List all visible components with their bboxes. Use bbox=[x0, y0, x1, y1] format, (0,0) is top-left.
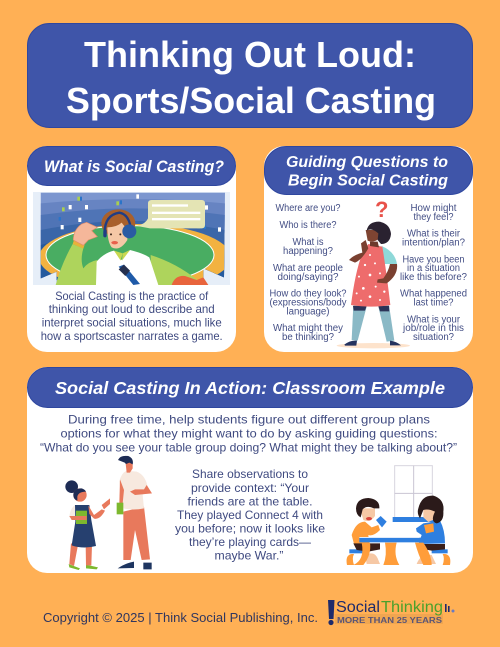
description text: interpret social situations, much like bbox=[42, 316, 222, 330]
title: Sports/Social Casting bbox=[66, 80, 436, 121]
questions: right column: job/role in this bbox=[402, 323, 464, 334]
logo: Social Thinking: Thinking bbox=[381, 599, 443, 616]
questions: left column bbox=[270, 203, 347, 343]
illustration: thinking woman: ? bbox=[375, 197, 388, 222]
title: Thinking Out Loud: bbox=[84, 34, 416, 75]
questions: left column: be thinking? bbox=[282, 332, 334, 343]
intro text bbox=[40, 414, 457, 454]
questions: left column: happening? bbox=[283, 246, 333, 257]
description text: how a sportscaster narrates a game. bbox=[41, 330, 223, 343]
questions: right column: What happened bbox=[400, 288, 467, 300]
example text: maybe War.” bbox=[214, 550, 284, 562]
questions: left column: What are people bbox=[273, 263, 343, 274]
example text: They played Connect 4 with bbox=[177, 509, 323, 522]
example text bbox=[175, 468, 325, 562]
heading: what is social casting bbox=[28, 146, 236, 186]
heading: guiding questions bbox=[264, 146, 472, 194]
description text: thinking out loud to describe and bbox=[49, 303, 215, 316]
heading: classroom example: Social Casting In Action: Classroom Example bbox=[55, 378, 445, 398]
intro text: options for what they might want to do by asking guiding questions: bbox=[60, 428, 438, 440]
heading: what is social casting: What is Social Casting? bbox=[44, 158, 224, 176]
questions: left column: What is bbox=[292, 237, 324, 248]
panel: social casting in action bbox=[27, 367, 473, 573]
example text: they’re playing cards— bbox=[189, 536, 311, 549]
example text: you before; now it looks like bbox=[175, 522, 325, 536]
questions: left column: (expressions/body bbox=[270, 298, 346, 308]
questions: right column: last time? bbox=[414, 298, 454, 308]
questions: right column: What is your bbox=[407, 314, 461, 326]
title bbox=[28, 24, 472, 128]
questions: right column: they feel? bbox=[414, 212, 454, 223]
description text: Social Casting is the practice of bbox=[55, 290, 209, 303]
panel: guiding questions bbox=[264, 146, 473, 352]
speech bubble bbox=[137, 200, 205, 228]
sportscaster figure bbox=[56, 209, 208, 285]
description text bbox=[41, 290, 223, 343]
questions: right column: intention/plan? bbox=[402, 238, 465, 248]
questions: right column: like this before? bbox=[400, 272, 467, 283]
questions: left column: Who is there? bbox=[280, 220, 337, 231]
heading: classroom example bbox=[28, 368, 472, 408]
heading: guiding questions: Guiding Questions to bbox=[286, 154, 448, 171]
questions: left column: Where are you? bbox=[276, 203, 341, 214]
questions: right column: situation? bbox=[413, 332, 454, 343]
questions: right column bbox=[400, 203, 467, 343]
questions: left column: What might they bbox=[273, 323, 343, 334]
illustration: kids playing cards at table bbox=[347, 466, 450, 565]
copyright footer: Copyright © 2025 | Think Social Publishing, Inc. bbox=[43, 610, 318, 625]
example text: Share observations to bbox=[192, 468, 309, 481]
illustration: thinking woman bbox=[337, 197, 410, 348]
questions: right column: What is their bbox=[407, 228, 461, 240]
questions: right column: Have you been bbox=[402, 254, 464, 266]
example text: provide context: “Your bbox=[191, 482, 309, 495]
questions: right column: in a situation bbox=[407, 263, 460, 274]
example text: friends are at the table. bbox=[188, 496, 312, 508]
questions: left column: How do they look? bbox=[270, 288, 347, 300]
questions: left column: language) bbox=[286, 306, 330, 318]
illustration: girl and teacher talking bbox=[65, 456, 152, 570]
logo: Social Thinking: MORE THAN 25 YEARS bbox=[337, 616, 443, 625]
panel: what is social casting bbox=[27, 146, 236, 352]
questions: right column: How might bbox=[410, 203, 457, 214]
questions: left column: doing/saying? bbox=[278, 272, 339, 283]
intro text: During free time, help students figure out different group plans bbox=[68, 414, 430, 426]
logo: Social Thinking: Social bbox=[336, 599, 380, 616]
illustration: sportscaster in stadium bbox=[33, 190, 231, 291]
intro text: “What do you see your table group doing? What might they be talking about?” bbox=[40, 442, 457, 454]
logo: Social Thinking bbox=[328, 599, 454, 625]
heading: guiding questions: Begin Social Casting bbox=[288, 172, 448, 190]
